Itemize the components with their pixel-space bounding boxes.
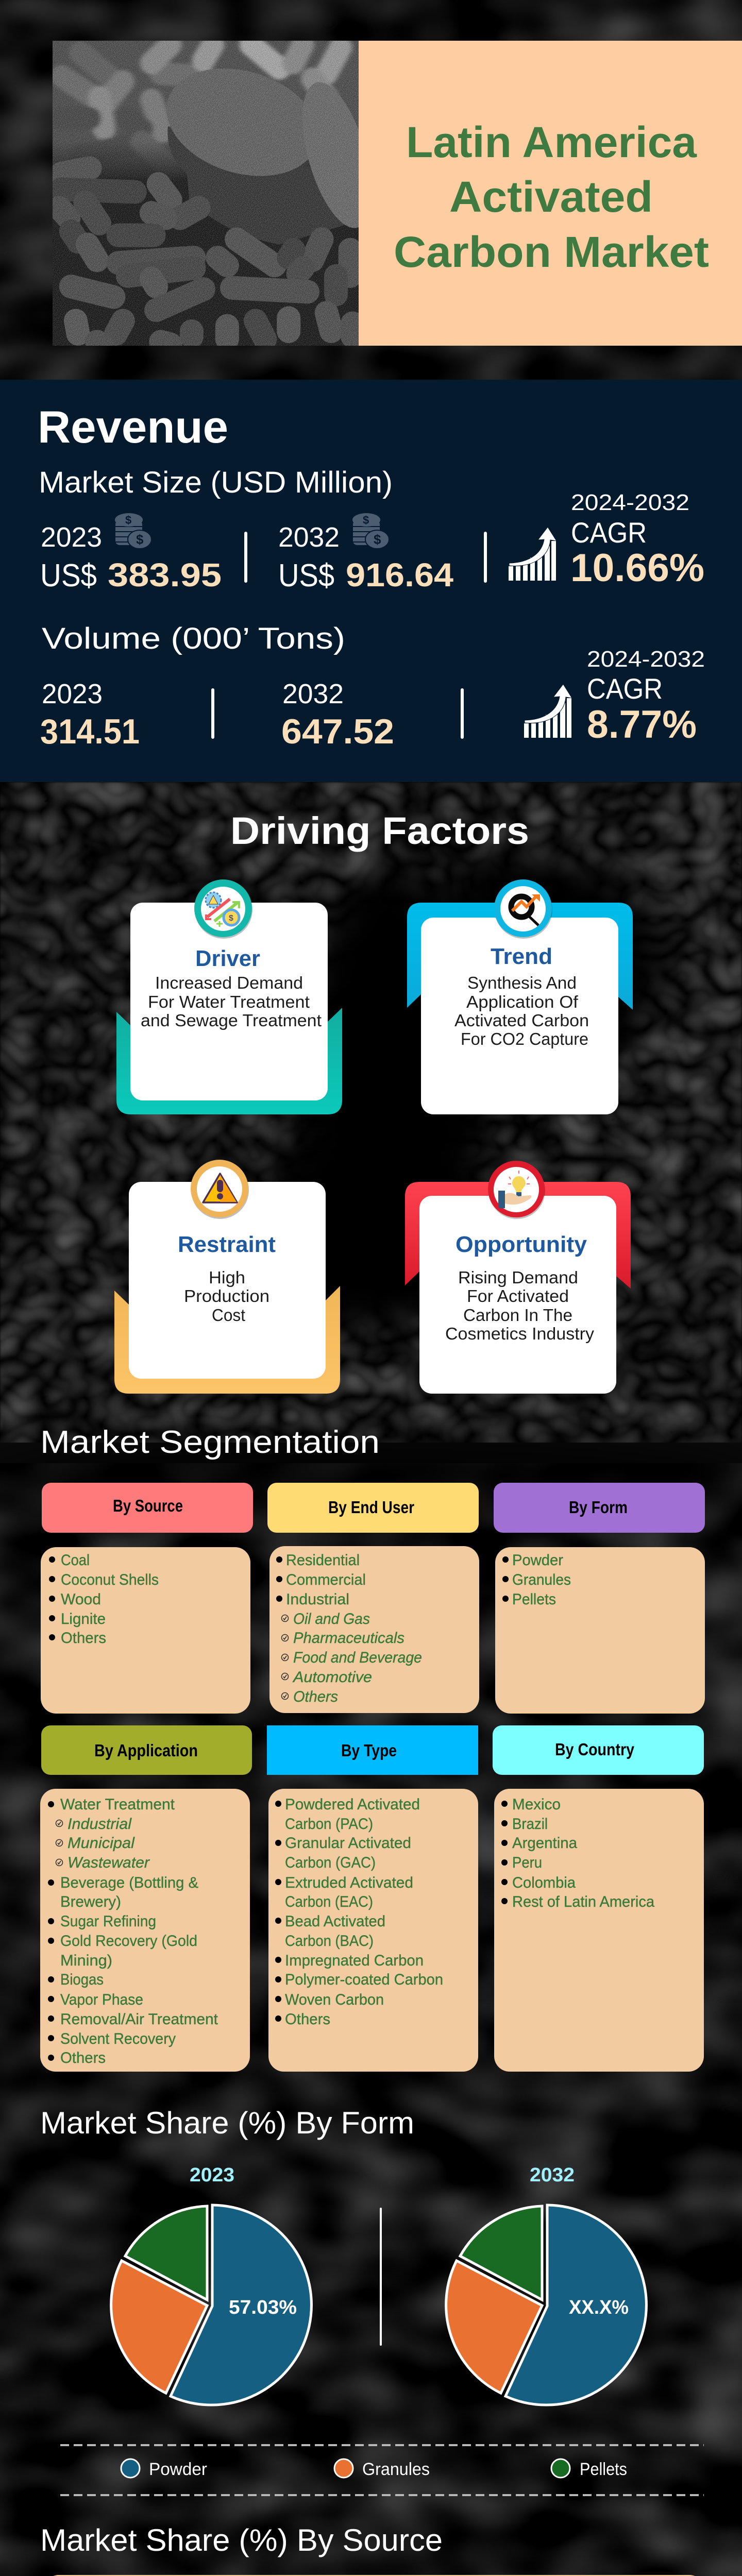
list: by type: Carbon (EAC) (285, 1893, 373, 1910)
pie chart: 2023: 2023 (190, 2164, 234, 2186)
stat: revenue CAGR (570, 490, 704, 590)
stat: 2032 revenue: US$ (278, 558, 334, 594)
heading: market share by source: Market Share (%) By Source (40, 2523, 443, 2557)
stat: volume CAGR: 8.77% (587, 703, 697, 747)
list: by application: Solvent Recovery (60, 2030, 176, 2047)
list: by type: Carbon (PAC) (285, 1816, 373, 1833)
list: by type (275, 1796, 443, 2028)
list: by application: Industrial (68, 1816, 132, 1833)
title text: Carbon Market (394, 228, 709, 276)
icon: trend magnifier (494, 879, 552, 939)
icon: coins 2032 (352, 513, 389, 549)
card: trend (407, 879, 633, 1114)
list: by type: Polymer-coated Carbon (285, 1971, 443, 1988)
icon: driver gears and arrows (194, 879, 252, 939)
list: by source: Lignite (61, 1611, 106, 1628)
heading: market share by form: Market Share (%) By Form (40, 2106, 414, 2140)
list: by end user: Commercial (286, 1571, 366, 1588)
list: by application: Vapor Phase (60, 1991, 143, 2008)
stat: 2023 volume: 2023 (42, 679, 103, 709)
stat: 2032 revenue: 916.64 (346, 556, 453, 594)
stat: 2023 revenue: 383.95 (108, 556, 222, 594)
segment: by country (493, 1725, 704, 2072)
heading: driving factors: Driving Factors (230, 809, 529, 852)
card: restraint (114, 1160, 340, 1394)
description: opportunity: Rising Demand (458, 1268, 578, 1287)
description: driver: Increased Demand (155, 973, 303, 992)
list: by country: Colombia (512, 1874, 576, 1891)
panel: revenue (0, 380, 742, 782)
list: by type: Others (285, 2011, 330, 2028)
pie chart: 2023: 57.03% (229, 2297, 297, 2318)
list: by type: Carbon (BAC) (285, 1933, 374, 1950)
list: by end user: Automotive (292, 1669, 372, 1686)
legend: form: Powder (149, 2460, 207, 2479)
list: by form (502, 1552, 571, 1608)
legend: form (121, 2459, 627, 2479)
stat: 2032 volume: 647.52 (281, 712, 394, 751)
stat: volume CAGR: CAGR (587, 672, 663, 705)
list: by form: Pellets (512, 1591, 556, 1608)
list: by application: Water Treatment (60, 1796, 175, 1813)
list: by source: Coconut Shells (61, 1571, 159, 1588)
list: by application: Others (60, 2049, 106, 2066)
segment: by type (267, 1725, 478, 2072)
pie chart: 2032: XX.X% (569, 2297, 629, 2318)
icon: warning triangle (191, 1160, 249, 1219)
list: by end user: Residential (286, 1552, 360, 1569)
description: restraint: Cost (212, 1306, 245, 1325)
description: opportunity: Cosmetics Industry (445, 1324, 595, 1343)
list: by source (49, 1552, 159, 1647)
list: by application (48, 1796, 218, 2066)
description: driver: For Water Treatment (148, 992, 310, 1011)
legend: form: Granules (362, 2460, 430, 2479)
list: by type: Carbon (GAC) (285, 1854, 376, 1871)
title text: Activated (449, 173, 653, 221)
icon: coins 2023: $ (125, 514, 131, 527)
pie chart: 2032 (446, 2164, 646, 2405)
icon: coins 2023: $ (136, 532, 144, 547)
list: by country: Rest of Latin America (512, 1893, 654, 1910)
list: by application: Municipal (68, 1835, 135, 1852)
description: opportunity: For Activated (467, 1286, 569, 1306)
description: trend: Activated Carbon (454, 1011, 589, 1030)
segment: by form (494, 1483, 705, 1714)
list: by type: Extruded Activated (285, 1874, 413, 1891)
heading: market segmentation: Market Segmentation (40, 1425, 380, 1460)
list: by source: Wood (61, 1591, 101, 1608)
stat: 2023 revenue (40, 522, 222, 594)
list: by country: Peru (512, 1854, 542, 1871)
segment: by type: By Type (341, 1741, 397, 1760)
segment: by form: By Form (569, 1498, 628, 1517)
panel: market share by source (41, 2575, 707, 2576)
list: by type: Woven Carbon (285, 1991, 384, 2008)
segment: by application (40, 1725, 252, 2072)
list: by country (501, 1796, 654, 1910)
label: trend: Trend (491, 944, 552, 969)
stat: 2023 volume (40, 679, 140, 751)
list: by application: Mining) (60, 1952, 112, 1969)
list: by application: Sugar Refining (60, 1913, 156, 1930)
label: driver: Driver (195, 946, 260, 971)
description: restraint: High (209, 1268, 245, 1287)
list: by application: Beverage (Bottling & (60, 1874, 198, 1891)
list: by end user (276, 1552, 422, 1705)
pie chart: 2023 (111, 2164, 311, 2405)
list: by application: Gold Recovery (Gold (60, 1933, 197, 1950)
segment: by country: By Country (555, 1740, 635, 1759)
list: by type: Impregnated Carbon (285, 1952, 424, 1969)
list: by end user: Food and Beverage (293, 1649, 422, 1666)
segment: by source: By Source (113, 1496, 183, 1515)
description: opportunity: Carbon In The (463, 1306, 572, 1325)
list: by country: Mexico (512, 1796, 561, 1813)
stat: 2023 revenue: US$ (40, 558, 97, 594)
stat: 2023 revenue: 2023 (41, 522, 102, 553)
stat: volume CAGR: 2024-2032 (587, 647, 705, 672)
list: by type: Bead Activated (285, 1913, 385, 1930)
list: by type: Granular Activated (285, 1835, 411, 1852)
icon: coins 2032: $ (363, 514, 369, 527)
stat: volume CAGR (587, 647, 705, 747)
list: by application: Brewery) (60, 1893, 121, 1910)
description: restraint: Production (184, 1286, 269, 1306)
list: by end user: Industrial (286, 1591, 349, 1608)
stat: 2032 volume: 2032 (282, 679, 344, 709)
list: by type: Powdered Activated (285, 1796, 420, 1813)
icon: growth arrow volume (524, 684, 572, 738)
description: opportunity (445, 1268, 595, 1343)
icon: coins 2032: $ (374, 532, 381, 547)
list: by application: Wastewater (68, 1854, 150, 1871)
list: by end user: Pharmaceuticals (293, 1630, 404, 1647)
description: trend: Application Of (466, 992, 579, 1011)
label: opportunity: Opportunity (456, 1232, 587, 1257)
card: driver (116, 879, 342, 1114)
label: restraint: Restraint (178, 1232, 276, 1257)
list: by form: Granules (512, 1571, 571, 1588)
hero: activated carbon pellets photo (53, 41, 384, 347)
title text (394, 118, 709, 276)
legend: form: Pellets (580, 2460, 627, 2479)
stat: revenue CAGR: 10.66% (570, 546, 704, 590)
segment: by source (41, 1483, 253, 1714)
description: restraint (184, 1268, 269, 1325)
stat: revenue CAGR: CAGR (571, 516, 647, 549)
list: by country: Brazil (512, 1816, 548, 1833)
description: trend: Synthesis And (467, 973, 577, 992)
list: by country: Argentina (512, 1835, 577, 1852)
list: by source: Others (61, 1630, 106, 1647)
segment: by application: By Application (94, 1741, 198, 1760)
panel: title (359, 41, 742, 346)
icon: bulb in hand (488, 1161, 545, 1219)
icon: coins 2023 (115, 513, 151, 549)
icon: driver gears and arrows: $ (229, 914, 233, 923)
list: by end user: Others (293, 1688, 338, 1705)
stat: 2023 volume: 314.51 (40, 712, 140, 751)
list: by form: Powder (512, 1552, 563, 1569)
subheading: market size: Market Size (USD Million) (39, 466, 393, 499)
heading: revenue: Revenue (38, 401, 228, 452)
icon: growth arrow revenue (509, 527, 556, 581)
description: trend: For CO2 Capture (461, 1029, 588, 1048)
card: opportunity (405, 1161, 631, 1394)
description: driver: and Sewage Treatment (141, 1011, 322, 1030)
description: trend (454, 973, 589, 1048)
list: by source: Coal (61, 1552, 90, 1569)
segment: by end user: By End User (328, 1498, 414, 1517)
stat: revenue CAGR: 2024-2032 (571, 490, 689, 515)
list: by end user: Oil and Gas (293, 1611, 370, 1628)
list: by application: Removal/Air Treatment (60, 2011, 218, 2028)
stat: 2032 revenue (278, 522, 453, 594)
pie chart: 2032: 2032 (530, 2164, 575, 2186)
list: by application: Biogas (60, 1971, 104, 1988)
stat: 2032 revenue: 2032 (278, 522, 340, 553)
description: driver (141, 973, 322, 1030)
segment: by end user (267, 1483, 479, 1713)
stat: 2032 volume (281, 679, 394, 751)
subheading: volume: Volume (000’ Tons) (42, 622, 345, 655)
title text: Latin America (406, 118, 697, 166)
